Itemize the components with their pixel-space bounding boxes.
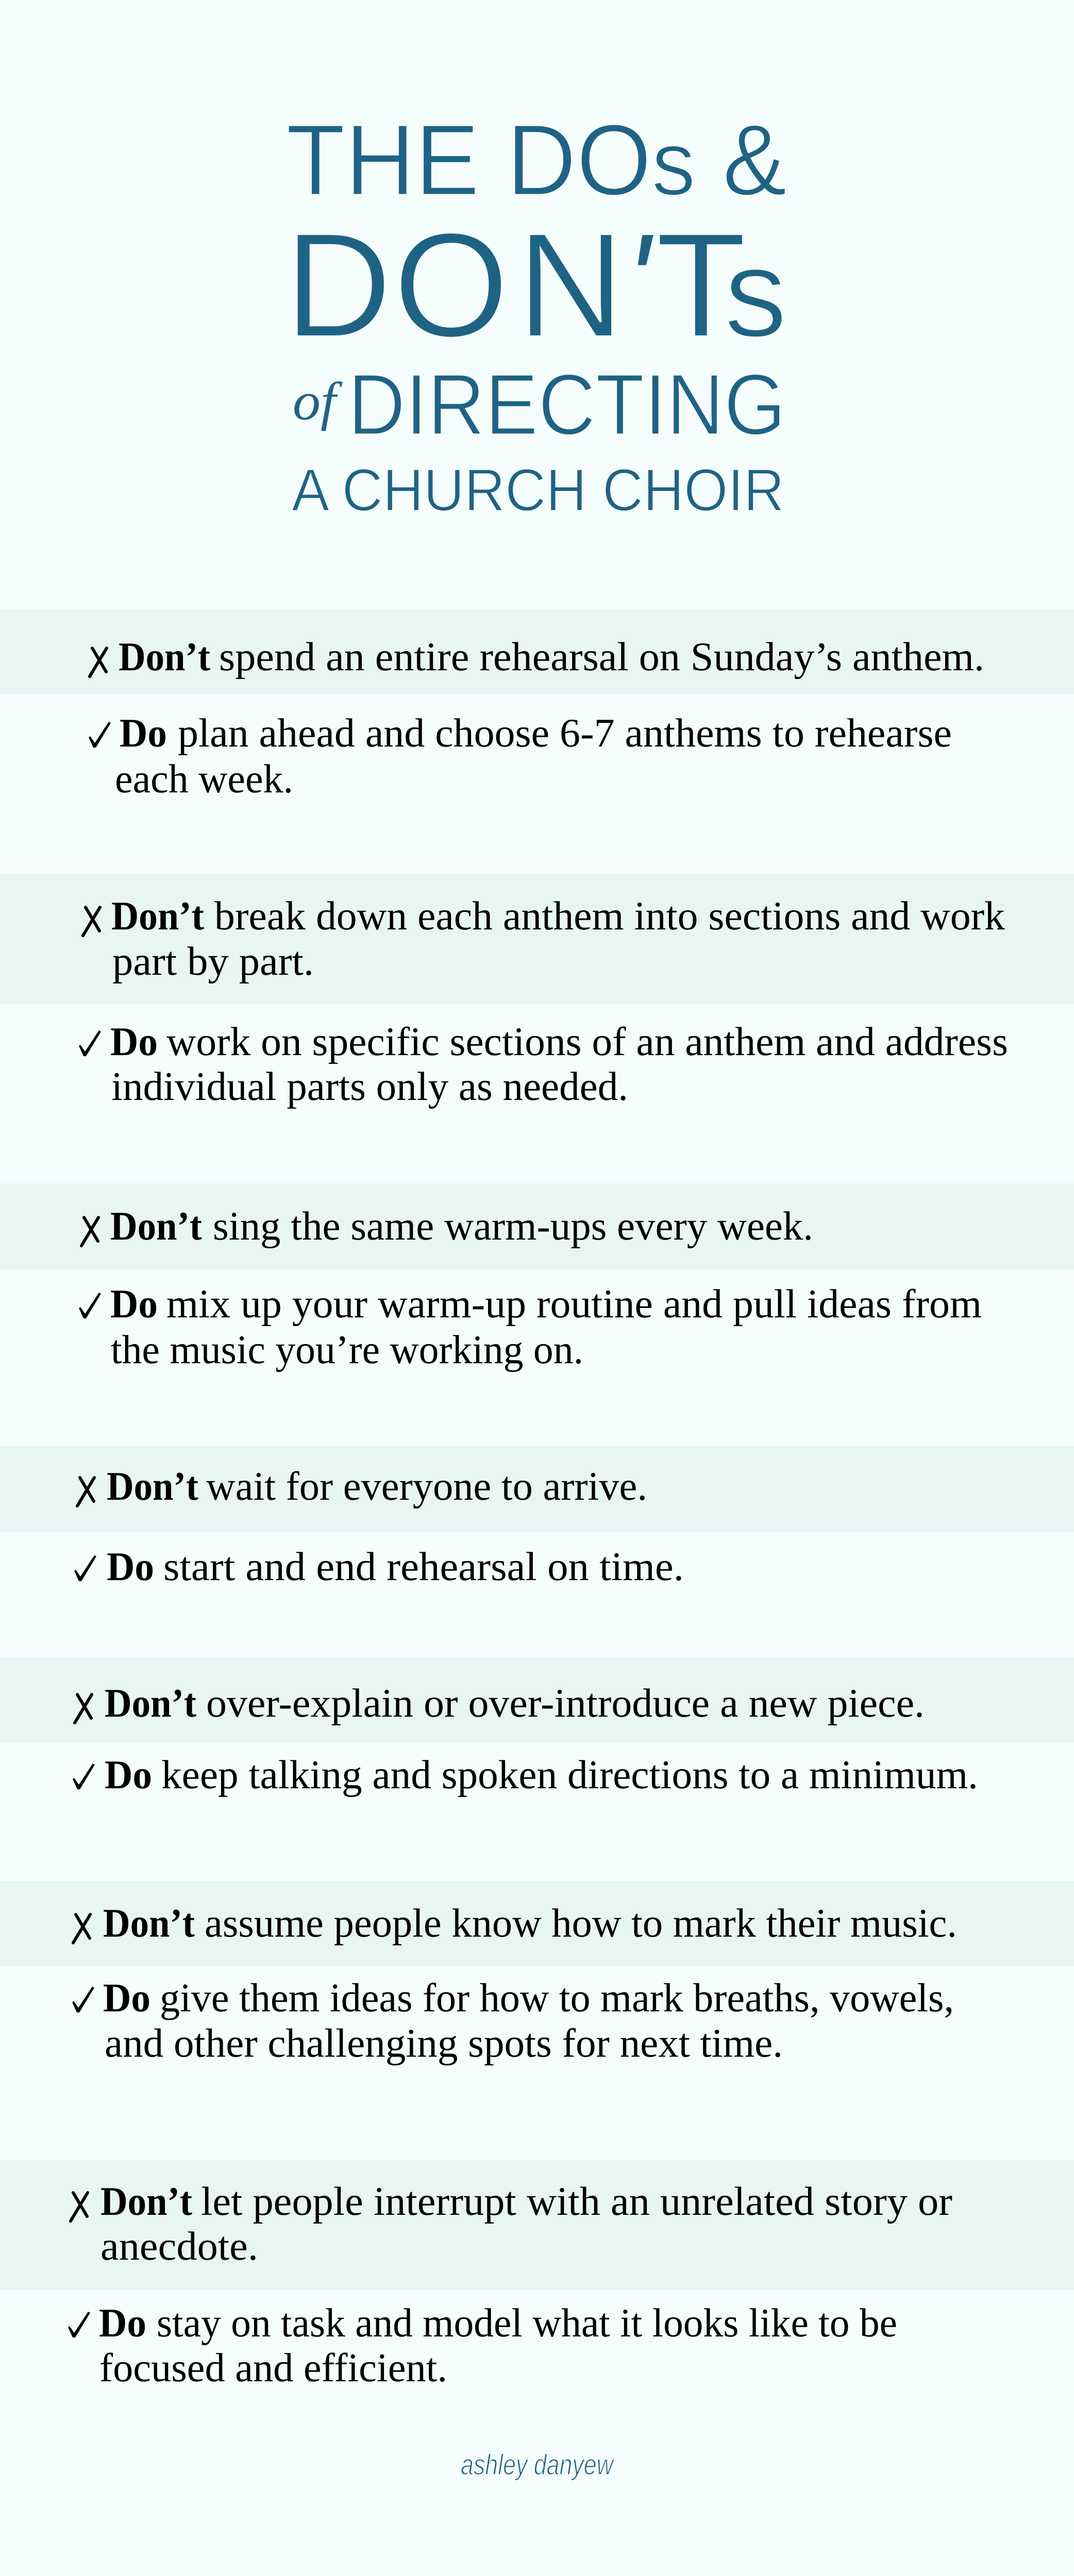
tip 6 don't band [0, 1881, 1074, 1967]
tip 5 do: keep talking and spoken directions to a minimum. [161, 1753, 978, 1798]
tip 3 don't band [0, 1183, 1074, 1269]
tip 1 do: each week. [115, 757, 293, 802]
tip 6 don't: Don’t [103, 1901, 195, 1946]
title line: DON'Ts: D [284, 202, 392, 368]
icon: check [73, 1764, 95, 1789]
tip 1 do: Do [120, 711, 167, 756]
icon: check [74, 1555, 96, 1581]
tip 1 don't: spend an entire rehearsal on Sunday’s anthem. [219, 635, 984, 680]
tip 7 don't band [0, 2160, 1074, 2290]
tip 2 don't band [0, 874, 1074, 1004]
tip 7 do: Do [99, 2301, 146, 2346]
tip 1 don't: Don’t [119, 635, 210, 680]
icon: check [79, 1030, 101, 1056]
tip 2 do: work on specific sections of an anthem and address [166, 1020, 1008, 1064]
tip 1 do: plan ahead and choose 6-7 anthems to rehearse [178, 711, 952, 756]
title line: DON'Ts: ' [622, 202, 657, 368]
tip 1 don't band [0, 609, 1074, 694]
signature: ashley danyew [461, 2448, 615, 2481]
title line: A CHURCH CHOIR: A CHURCH CHOIR [292, 456, 784, 523]
tip 2 do [79, 1020, 1008, 1109]
tip 1 do [89, 711, 952, 802]
icon: cross [83, 907, 100, 936]
tip 2 don't: Don’t [111, 894, 204, 939]
icon: cross [90, 648, 107, 676]
tip 6 do: Do [103, 1976, 150, 2021]
title line: THE DOs &: THE DOs & [286, 104, 787, 216]
tip 6 do: give them ideas for how to mark breaths, vowels, [160, 1976, 954, 2021]
tip 6 do [72, 1976, 954, 2066]
title [284, 104, 787, 523]
tip 4 do: start and end rehearsal on time. [163, 1545, 684, 1589]
icon: check [68, 2312, 90, 2337]
tip 3 don't: Don’t [110, 1204, 202, 1249]
tip 3 do: Do [110, 1282, 158, 1327]
icon: cross [75, 1694, 92, 1723]
tip 6 do: and other challenging spots for next time. [105, 2021, 783, 2066]
tip 2 don't: part by part. [112, 939, 314, 984]
tip 6 don't: assume people know how to mark their music. [205, 1901, 957, 1946]
icon: check [89, 722, 111, 748]
title line: DON'Ts: s [724, 222, 787, 363]
tip 2 don't [83, 894, 1005, 984]
tip 7 do [68, 2301, 897, 2391]
title line: DON'Ts: O [393, 202, 509, 368]
tip 5 do: Do [105, 1753, 152, 1798]
tip 5 don't: over-explain or over-introduce a new piece. [206, 1681, 925, 1726]
tip 7 don't [71, 2179, 952, 2269]
title line: DON'Ts: T [656, 202, 747, 368]
tip 5 don't: Don’t [105, 1681, 196, 1726]
tip 3 don't: sing the same warm-ups every week. [213, 1204, 813, 1249]
tip 7 do: stay on task and model what it looks like to be [157, 2301, 897, 2346]
tip 3 do [79, 1282, 982, 1372]
tip 2 do: Do [110, 1020, 158, 1064]
icon: check [72, 1987, 94, 2012]
tip 5 don't band [0, 1657, 1074, 1743]
title word: DIRECTING: DIRECTING [348, 356, 786, 453]
tip 7 don't: let people interrupt with an unrelated story or [201, 2179, 952, 2224]
tip 4 don't band [0, 1446, 1074, 1532]
tip 7 don't: anecdote. [100, 2224, 258, 2269]
icon: cross [81, 1217, 98, 1246]
tip 2 don't: break down each anthem into sections and work [214, 894, 1005, 939]
tip 4 do: Do [107, 1545, 154, 1589]
tip 2 do: individual parts only as needed. [111, 1064, 628, 1109]
tip 4 don't: wait for everyone to arrive. [206, 1464, 647, 1509]
icon: cross [71, 2193, 88, 2221]
title line: DON'Ts: N [517, 202, 625, 368]
tip 3 do: mix up your warm-up routine and pull ideas from [166, 1282, 982, 1327]
tip 4 don't: Don’t [107, 1464, 198, 1509]
icon: cross [77, 1478, 94, 1506]
title word: of: of [293, 371, 343, 431]
icon: check [79, 1293, 101, 1318]
tip 3 do: the music you’re working on. [111, 1328, 583, 1372]
tip 7 do: focused and efficient. [99, 2346, 447, 2391]
icon: cross [73, 1914, 90, 1943]
tip 7 don't: Don’t [100, 2179, 192, 2224]
